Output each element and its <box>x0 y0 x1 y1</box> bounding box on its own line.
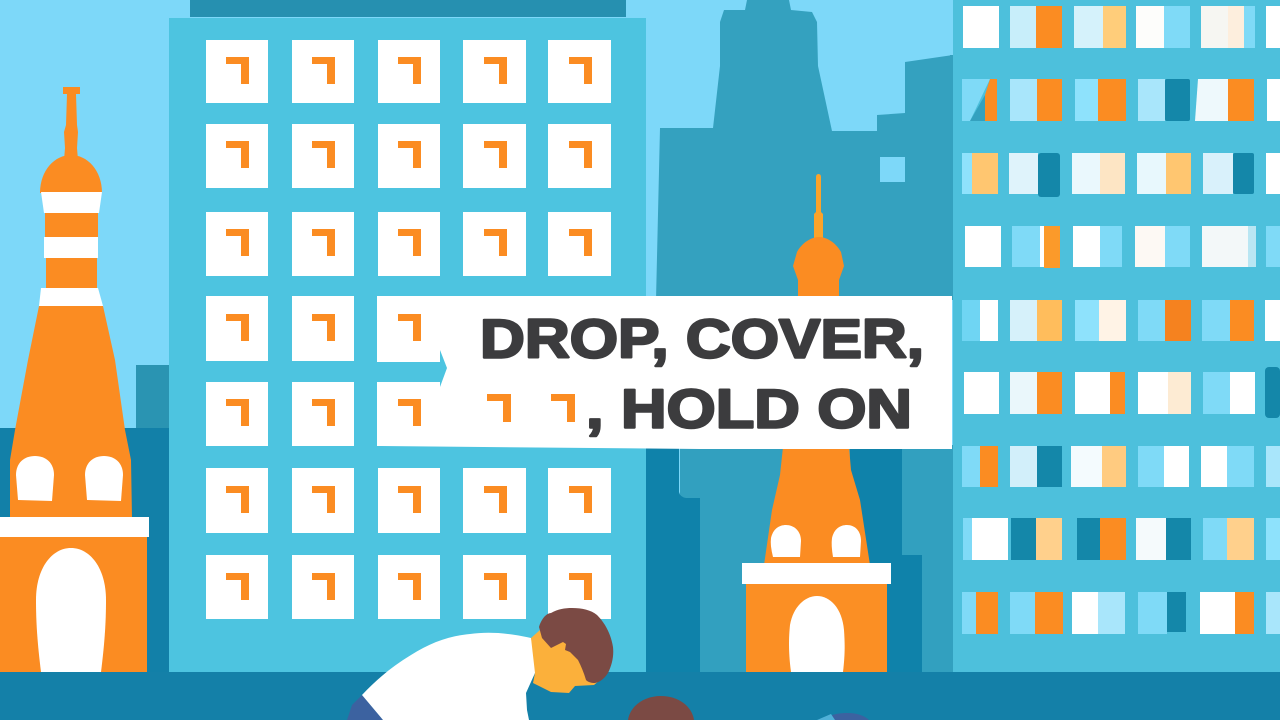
left tower door <box>36 548 106 672</box>
left tower body <box>10 306 132 518</box>
third person back <box>817 713 869 720</box>
window row 8 <box>963 518 1280 560</box>
left tower striped neck <box>39 192 103 306</box>
title banner <box>377 296 952 449</box>
banner background <box>377 296 952 449</box>
window row 2 <box>962 79 1280 121</box>
building body <box>169 18 646 672</box>
middle orange tower <box>742 174 891 672</box>
person trousers <box>347 695 383 720</box>
left tower spire <box>63 87 80 160</box>
building roof <box>190 0 626 17</box>
title line 2: , HOLD ON <box>586 378 912 440</box>
left tower base <box>0 537 147 672</box>
person crouching <box>347 608 613 720</box>
person face <box>531 630 600 693</box>
second person head <box>628 696 694 720</box>
window row 3 <box>962 153 1280 197</box>
window row 6 <box>964 367 1280 418</box>
middle tower dome <box>793 237 844 298</box>
middle tower door <box>789 596 845 672</box>
right building body <box>953 0 1280 672</box>
left tower arched windows <box>16 456 123 501</box>
middle tower spire <box>814 174 823 240</box>
middle tower base <box>746 584 887 672</box>
window row 7 <box>962 446 1280 487</box>
window row 9 <box>962 592 1280 634</box>
middle tower arched windows <box>771 525 861 557</box>
arrow <box>377 350 447 387</box>
window row 4 <box>965 226 1280 268</box>
person hair <box>539 608 613 683</box>
person shirt <box>362 633 536 720</box>
window row 5 <box>962 300 1280 341</box>
ground strip <box>0 672 1280 720</box>
title line 1: DROP, COVER, <box>480 308 924 370</box>
skyline: back left buildings <box>0 365 176 678</box>
skyline: back centre tower silhouette <box>646 0 955 675</box>
window corner marks <box>226 57 592 600</box>
middle tower white ledge <box>742 563 891 584</box>
broken glyph marks in title <box>487 394 575 422</box>
left tower dome <box>40 155 102 193</box>
left orange tower <box>0 87 149 672</box>
building windows <box>206 40 611 619</box>
window row 1 <box>963 6 1280 48</box>
middle tower body <box>764 447 870 565</box>
right apartment building <box>953 0 1280 672</box>
main office building <box>169 0 646 672</box>
left tower white ledge <box>0 517 149 537</box>
